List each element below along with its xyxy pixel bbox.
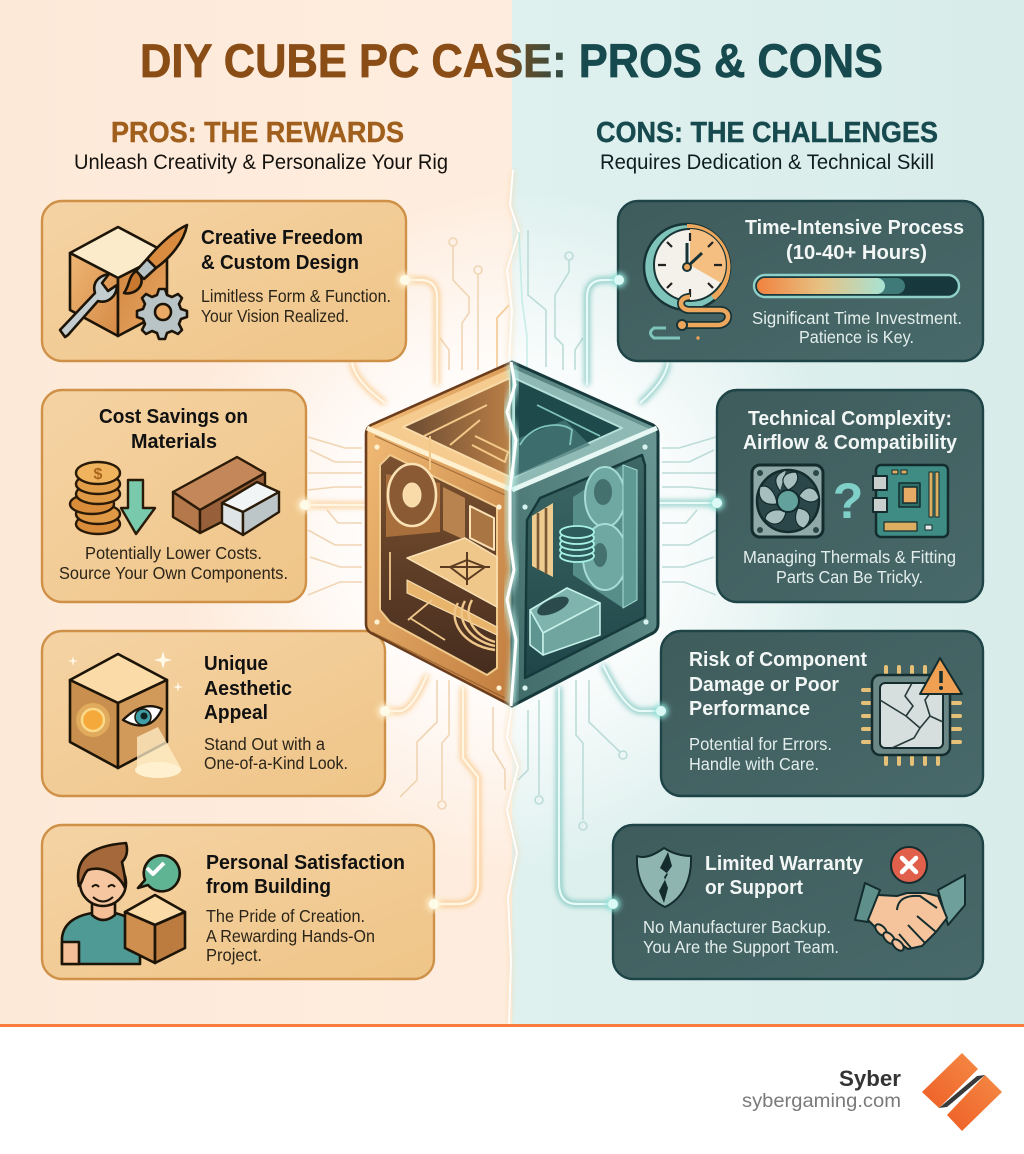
icon: cracked chip with warning: [863, 658, 962, 764]
connectors: cons glow: [559, 280, 717, 904]
text: personal satisfaction: Project.: [206, 945, 262, 965]
connector dots: [298, 273, 724, 911]
text: limited warranty: No Manufacturer Backup.: [643, 917, 831, 937]
cube: teal right half: [512, 362, 658, 706]
faint circuit traces: pros side: [308, 238, 509, 809]
heading: cons: Requires Dedication & Technical Skill: [600, 151, 934, 174]
connectors: cons core: [559, 280, 717, 904]
icon: coins with down arrow: [70, 462, 155, 534]
text: risk of damage: Potential for Errors.: [689, 734, 832, 754]
text: personal satisfaction: from Building: [206, 875, 331, 898]
text: creative freedom: Creative Freedom: [201, 226, 363, 249]
text: time-intensive body: Significant Time Investment.: [752, 308, 962, 328]
text: cost savings heading: Materials: [131, 430, 217, 453]
text: technical complexity body: Parts Can Be Tricky.: [776, 567, 923, 587]
central glow: [172, 190, 852, 870]
icon: clock with cord: [644, 224, 730, 340]
text: risk of damage: Risk of Component: [689, 648, 867, 671]
text: time-intensive heading: (10-40+ Hours): [786, 241, 927, 264]
text: cost savings body: Source Your Own Components.: [59, 563, 288, 583]
icon: question mark: ?: [833, 473, 863, 529]
text: creative freedom: Your Vision Realized.: [201, 306, 349, 326]
text: personal satisfaction: [206, 851, 405, 965]
text: personal satisfaction: Personal Satisfaction: [206, 851, 405, 874]
panel: personal satisfaction: [42, 825, 434, 979]
text: risk of damage: Handle with Care.: [689, 754, 819, 774]
text: unique aesthetic: One-of-a-Kind Look.: [204, 753, 348, 773]
cube: warm left half: [366, 362, 512, 706]
text: risk of damage: Performance: [689, 697, 810, 720]
text: risk of damage: [689, 648, 867, 774]
icon: smiling builder with cube: [62, 843, 185, 964]
background: pros half: [0, 0, 512, 1024]
text: personal satisfaction: A Rewarding Hands-On: [206, 926, 375, 946]
text: creative freedom: & Custom Design: [201, 251, 359, 274]
logo: [922, 1053, 1002, 1131]
panel: risk of damage: [661, 631, 983, 796]
text: cost savings heading: Cost Savings on: [99, 405, 248, 428]
title: DIY CUBE PC CASE: PROS & CONS: [140, 34, 883, 87]
text: technical complexity body: Managing Thermals & Fitting: [743, 547, 956, 567]
text: limited warranty: [643, 852, 864, 957]
icon: wood and metal blocks: [173, 457, 279, 535]
text: personal satisfaction: The Pride of Creation.: [206, 906, 365, 926]
footer rule: [0, 1024, 1024, 1027]
panel: cost savings: [42, 390, 306, 602]
icon: cooling fan: [752, 465, 823, 537]
brand name: Syber: [839, 1066, 901, 1091]
text: unique aesthetic: Appeal: [204, 701, 268, 724]
central split cube: [366, 362, 658, 706]
icon: red cross: [891, 847, 927, 883]
icon: motherboard: [873, 465, 948, 537]
text: technical complexity heading: Airflow & Compatibility: [743, 431, 958, 454]
icon: cube with brush, wrench and gear: [60, 225, 187, 339]
icon: coins with down arrow: $: [94, 466, 103, 483]
text: unique aesthetic: Unique: [204, 652, 268, 675]
text: limited warranty: You Are the Support Team.: [643, 937, 839, 957]
icon: broken shield: [637, 848, 691, 907]
connectors: pros core: [305, 280, 478, 904]
text: unique aesthetic: Stand Out with a: [204, 734, 325, 754]
text: cost savings body: [59, 543, 288, 583]
background: cons half: [512, 0, 1024, 1024]
footer band: [0, 1024, 1024, 1154]
connectors: pros glow: [305, 280, 478, 904]
text: cost savings heading: [99, 405, 248, 453]
text: creative freedom: Limitless Form & Function.: [201, 286, 391, 306]
heading: cons: CONS: THE CHALLENGES: [596, 117, 938, 149]
text: time-intensive heading: [745, 216, 964, 264]
cube: centre lightning seam: [507, 362, 516, 706]
text: time-intensive body: [752, 308, 962, 347]
text: cost savings body: Potentially Lower Costs.: [85, 543, 262, 563]
text: unique aesthetic: [204, 652, 348, 773]
text: time-intensive body: Patience is Key.: [799, 327, 914, 347]
heading: pros: [74, 117, 448, 174]
text: limited warranty: or Support: [705, 876, 803, 899]
text: creative freedom: [201, 226, 391, 326]
text: unique aesthetic: Aesthetic: [204, 677, 292, 700]
heading: pros: PROS: THE REWARDS: [111, 117, 404, 149]
heading: cons: [596, 117, 938, 174]
icon: glowing cube with eye: [68, 651, 183, 778]
brand url: sybergaming.com: [742, 1090, 901, 1112]
text: technical complexity heading: [743, 407, 958, 454]
faint circuit traces: cons side: [518, 230, 716, 830]
central lightning split: [507, 170, 527, 1024]
text: technical complexity heading: Technical Complexity:: [748, 407, 952, 430]
panel: time-intensive: [618, 201, 983, 361]
panel: unique aesthetic: [42, 631, 385, 796]
text: time-intensive heading: Time-Intensive Process: [745, 216, 964, 239]
panel: technical complexity: [717, 390, 983, 602]
text: risk of damage: Damage or Poor: [689, 673, 839, 696]
progress bar: [754, 275, 959, 297]
heading: pros: Unleash Creativity & Personalize Your Rig: [74, 151, 448, 174]
panel: creative freedom: [42, 201, 406, 361]
panel: limited warranty: [613, 825, 983, 979]
icon: handshake: [855, 875, 965, 953]
text: technical complexity body: [743, 547, 956, 587]
text: limited warranty: Limited Warranty: [705, 852, 864, 875]
